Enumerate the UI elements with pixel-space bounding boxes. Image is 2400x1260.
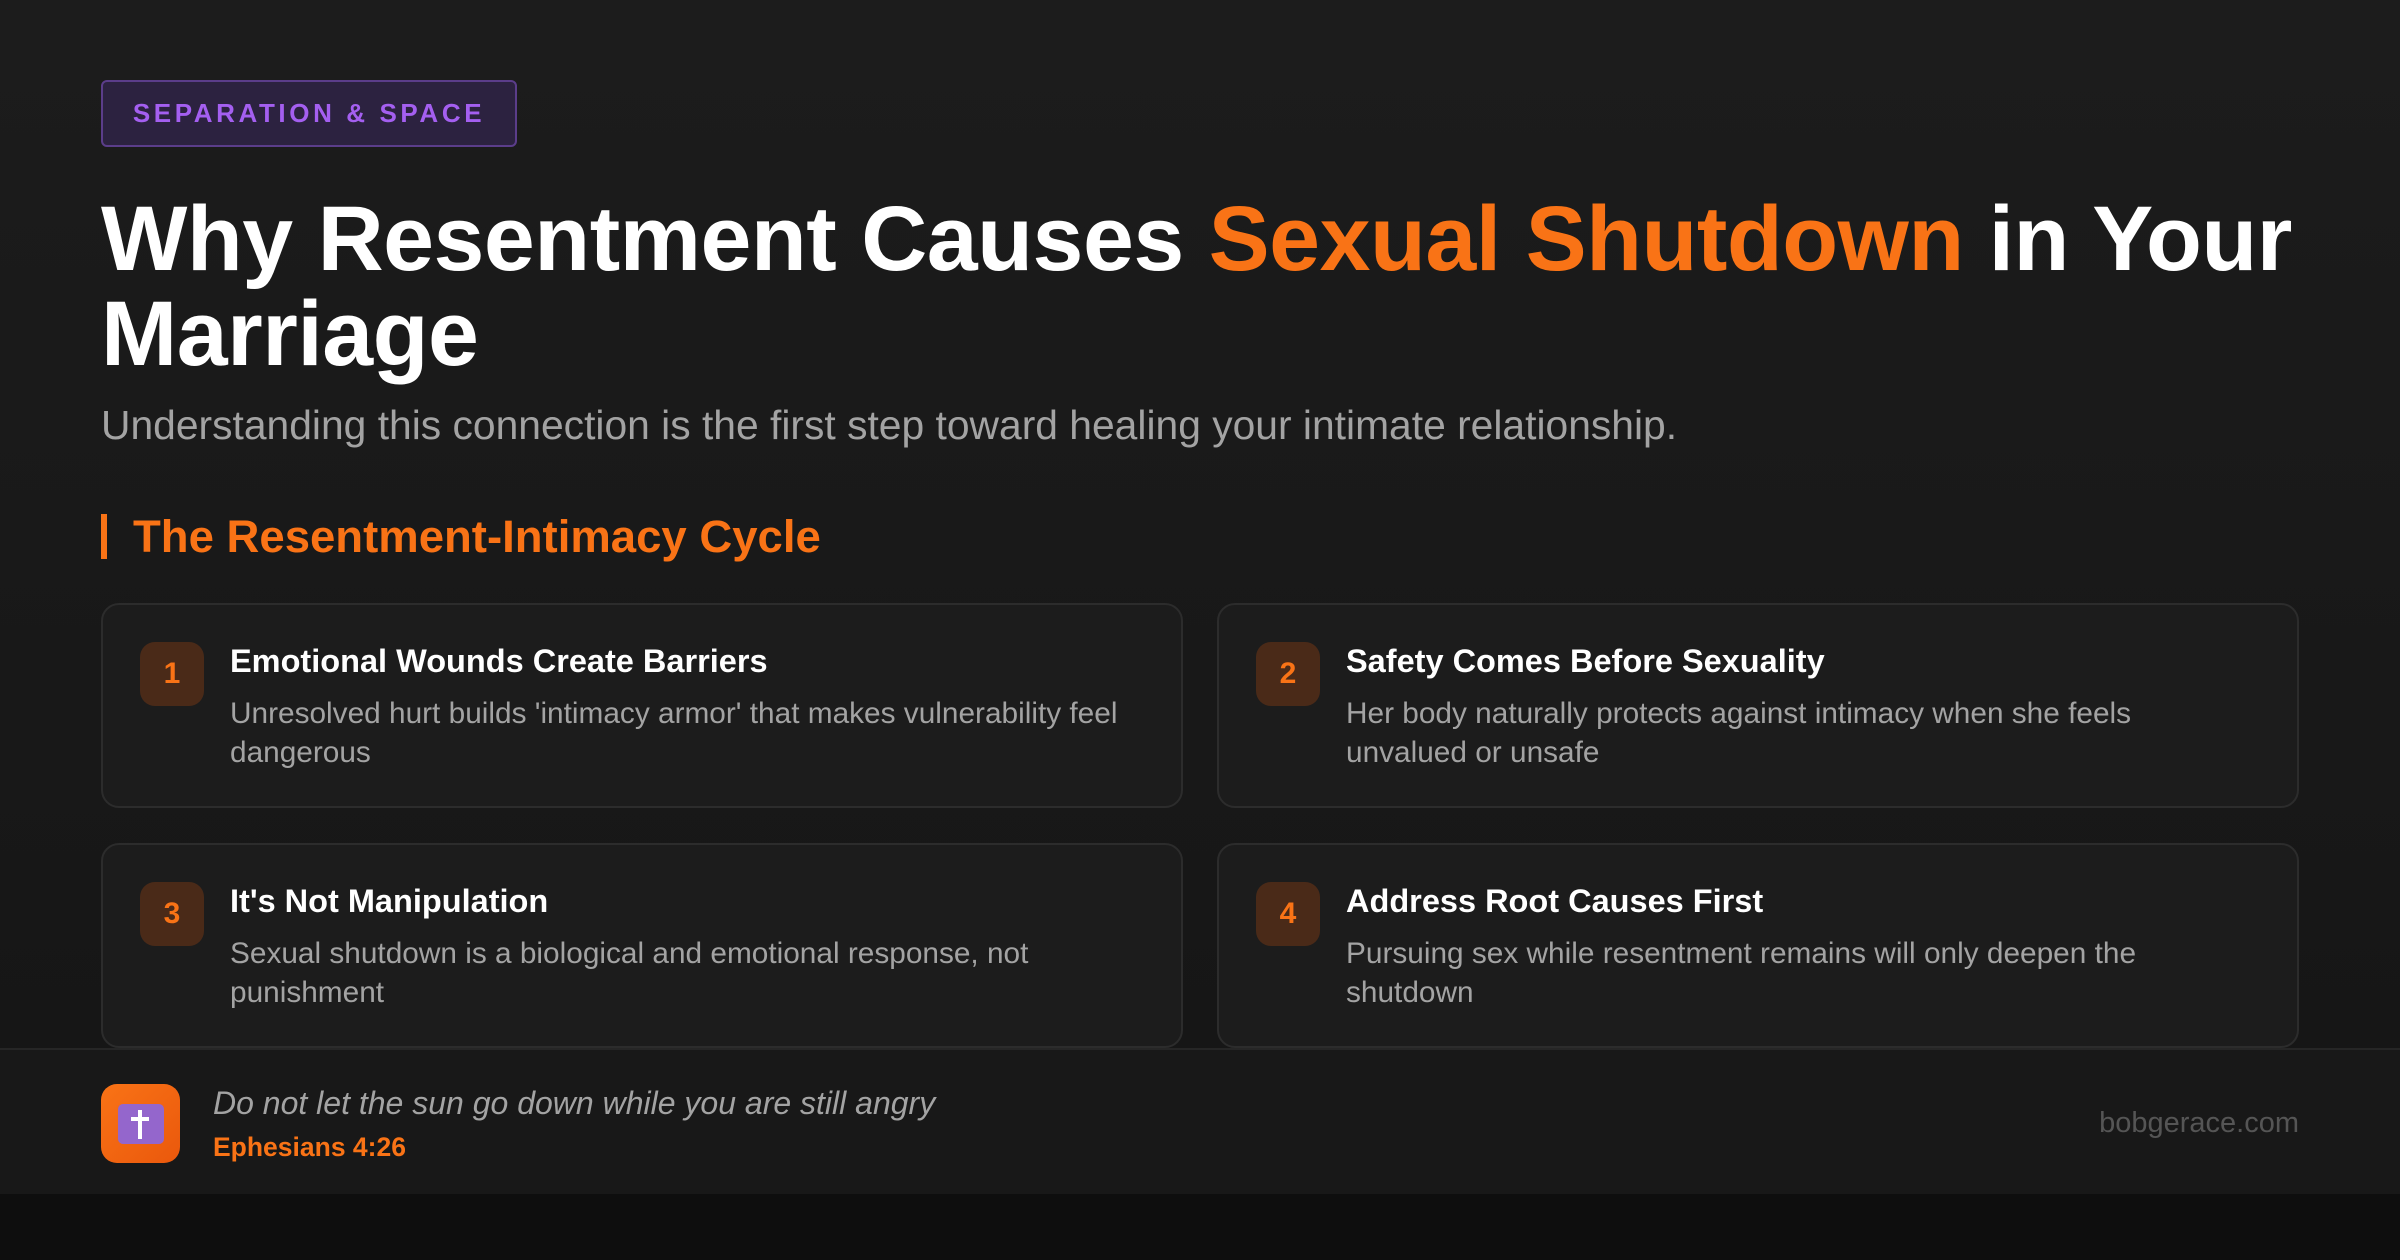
- number 4: 4: [1280, 897, 1296, 930]
- card 1: [101, 603, 1183, 808]
- card 4: [1217, 843, 2299, 1048]
- card 3 title: It's Not Manipulation: [230, 883, 548, 919]
- card 1 text: Unresolved hurt builds 'intimacy armor' that makes vulnerability feel dangerous: [230, 697, 1117, 769]
- number 3: 3: [164, 897, 180, 930]
- card 3 text: Sexual shutdown is a biological and emotional response, not punishment: [230, 937, 1028, 1009]
- website: bobgerace.com: [2099, 1107, 2299, 1139]
- number 1: 1: [164, 657, 180, 690]
- number 4: [1256, 882, 1320, 946]
- card 4 text: Pursuing sex while resentment remains will only deepen the shutdown: [1346, 937, 2136, 1009]
- card 2: [1217, 603, 2299, 808]
- number 1: [140, 642, 204, 706]
- badge: [101, 80, 517, 147]
- card 1 title: Emotional Wounds Create Barriers: [230, 643, 768, 679]
- badge: SEPARATION & SPACE: [133, 98, 485, 128]
- quote: Do not let the sun go down while you are still angry: [213, 1085, 935, 1121]
- footer: [0, 1048, 2400, 1194]
- title: Why Resentment Causes Sexual Shutdown in Your Marriage: [101, 188, 2292, 385]
- card 3: [101, 843, 1183, 1048]
- number 2: [1256, 642, 1320, 706]
- reference: Ephesians 4:26: [213, 1132, 406, 1162]
- card 4 title: Address Root Causes First: [1346, 883, 1763, 919]
- section heading: The Resentment-Intimacy Cycle: [133, 511, 821, 562]
- icon: cross: [101, 1084, 180, 1163]
- number 3: [140, 882, 204, 946]
- card 2 title: Safety Comes Before Sexuality: [1346, 643, 1825, 679]
- subtitle: Understanding this connection is the first step toward healing your intimate relationship.: [101, 402, 1677, 448]
- card 2 text: Her body naturally protects against intimacy when she feels unvalued or unsafe: [1346, 697, 2131, 769]
- number 2: 2: [1280, 657, 1296, 690]
